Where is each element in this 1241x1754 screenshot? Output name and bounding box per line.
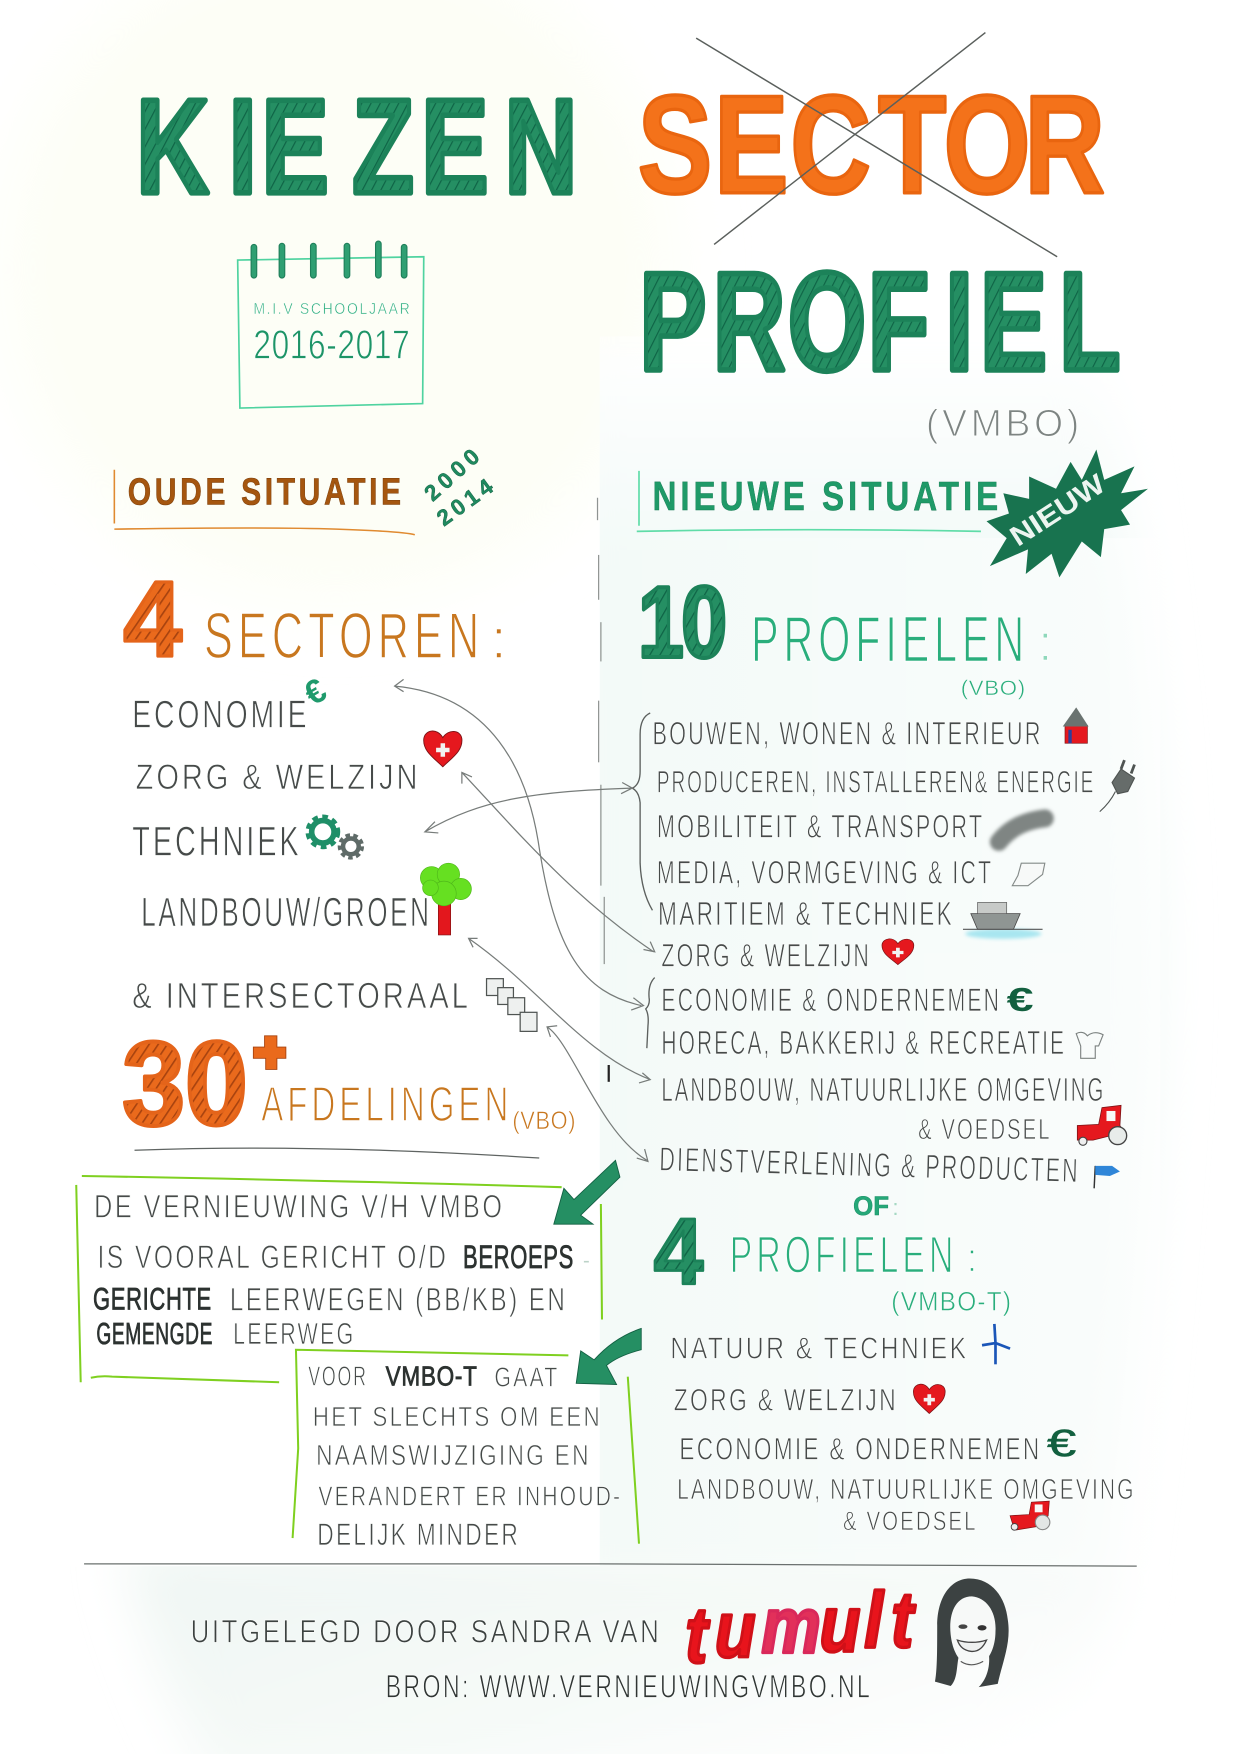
profile list: MEDIA, VORMGEVING & ICT [657, 854, 993, 890]
colon: : [1038, 613, 1052, 671]
vmbo-t list: ECONOMIE & ONDERNEMEN [679, 1432, 1041, 1467]
icon: road [999, 818, 1045, 842]
heading: sectoren: SECTOREN [204, 599, 484, 672]
vmbo-t label: (VMBO-T) [891, 1287, 1012, 1317]
badge: nieuw: NIEUW [1004, 468, 1111, 552]
arrow: techniek [425, 782, 632, 833]
arrow: intersectoraal [547, 1026, 648, 1161]
sector list: ECONOMIE [132, 693, 309, 737]
profile list: MOBILITEIT & TRANSPORT [657, 808, 984, 844]
panel: vmbo-t callout [293, 1328, 641, 1552]
icon: euro: € [1007, 982, 1034, 1019]
heading: profielen: PROFIELEN [730, 1225, 957, 1283]
icon: chef jacket [1076, 1032, 1103, 1058]
sector list: ZORG & WELZIJN [136, 759, 420, 797]
vmbo subtitle: (VMBO) [926, 403, 1083, 445]
profile list: MARITIEM & TECHNIEK [658, 896, 954, 933]
title word: sector: SECTOR [638, 66, 1105, 223]
badge: nieuw [987, 450, 1148, 577]
sector list: TECHNIEK [132, 817, 302, 864]
years: 2000 [419, 444, 484, 506]
profile list: ZORG & WELZIJN [661, 937, 871, 973]
vmbo-t list: NATUUR & TECHNIEK [670, 1333, 969, 1366]
icon: arrow [554, 1160, 620, 1224]
icon: tractor [1077, 1105, 1127, 1145]
icon: tractor [1010, 1501, 1050, 1530]
big number 30: 30 [122, 1017, 248, 1150]
colon: : [491, 607, 507, 670]
callout text: LEERWEG [233, 1318, 355, 1351]
callout text: VERANDERT ER INHOUD- [318, 1481, 622, 1512]
icon: tree [420, 863, 471, 935]
label: of: OF [853, 1191, 889, 1221]
big number 4: 4 [654, 1200, 703, 1304]
arrow: landbouw [469, 938, 650, 1083]
title word: profiel: PROFIEL [639, 243, 1121, 400]
rule under left column [135, 1148, 539, 1158]
callout frame [293, 1350, 639, 1544]
callout text [93, 1188, 590, 1351]
connector arrows [395, 679, 655, 1161]
icon: plug [1100, 760, 1135, 812]
callout text: HET SLECHTS OM EEN [313, 1401, 602, 1432]
callout text: GAAT [494, 1362, 559, 1393]
afdelingen label: AFDELINGEN [261, 1077, 512, 1132]
title word: kiezen: KIEZEN [136, 72, 577, 222]
heading: profielen: PROFIELEN [751, 602, 1029, 675]
vmbo-t list: & VOEDSEL [843, 1506, 978, 1536]
icon: ship [963, 902, 1043, 939]
heading frame [637, 471, 981, 531]
callout text: VMBO-T [386, 1361, 478, 1392]
arrow: zorg en welzijn [462, 772, 655, 952]
vbo label: (VBO) [961, 676, 1026, 700]
credit line: UITGELEGD DOOR SANDRA VAN [191, 1613, 661, 1649]
icon: house [1063, 707, 1089, 743]
callout text: GERICHTE [93, 1281, 212, 1316]
sector list [132, 672, 537, 1031]
callout text: NAAMSWIJZIGING EN [316, 1440, 591, 1472]
callout text [308, 1361, 622, 1552]
crossing out of sector [696, 33, 1057, 257]
icon: stacked papers [487, 979, 537, 1031]
divider [598, 498, 609, 1082]
portrait [935, 1578, 1009, 1687]
big number 4: 4 [123, 559, 182, 679]
footer rule [84, 1564, 1137, 1566]
icon: arrow [576, 1328, 641, 1384]
heading: nieuwe situatie: NIEUWE SITUATIE [652, 473, 1002, 519]
panel: oude situatie [114, 444, 576, 1150]
profile list [646, 707, 1135, 1190]
footer [191, 1577, 1009, 1704]
panel: vernieuwing callout [76, 1160, 620, 1382]
callout text: IS VOORAL GERICHT O/D [98, 1239, 448, 1275]
profile list: BOUWEN, WONEN & INTERIEUR [652, 715, 1043, 751]
callout text: BEROEPS [463, 1239, 574, 1275]
logo: tumult: tumult [685, 1577, 916, 1680]
icon: wind turbine [982, 1324, 1010, 1364]
vmbo-t list [670, 1324, 1136, 1536]
profile list: & VOEDSEL [918, 1114, 1052, 1146]
sector list: LANDBOUW/GROEN [141, 889, 432, 935]
plus sign [253, 1036, 286, 1069]
panel: nieuwe situatie [632, 450, 1148, 1536]
title [136, 33, 1121, 445]
icon: heart [882, 939, 914, 965]
callout text: DE VERNIEUWING V/H VMBO [94, 1188, 504, 1224]
heading: oude situatie: OUDE SITUATIE [128, 471, 405, 513]
icon: euro: € [298, 672, 333, 713]
small brace [646, 978, 655, 1048]
years [419, 444, 498, 531]
callout text: VOOR [308, 1361, 368, 1392]
arrow: economie [395, 679, 643, 1010]
icon: spiral rings [251, 241, 407, 278]
colon: : [892, 1195, 899, 1220]
calendar caption: M.I.V SCHOOLJAAR [253, 301, 411, 318]
sector list: & INTERSECTORAAL [132, 976, 471, 1016]
big number 10: 10 [638, 565, 724, 679]
icon: document [1012, 863, 1045, 886]
calendar note [238, 241, 424, 408]
callout text: LEERWEGEN (BB/KB) EN [230, 1282, 567, 1318]
callout frame [76, 1176, 602, 1382]
source line: BRON: WWW.VERNIEUWINGVMBO.NL [386, 1668, 872, 1704]
icon: flag [1094, 1166, 1120, 1188]
years: 2014 [432, 474, 498, 531]
heading frame [114, 470, 415, 535]
vbo label: (VBO) [512, 1108, 576, 1135]
callout text: - [583, 1250, 590, 1272]
profile list: ECONOMIE & ONDERNEMEN [661, 982, 1001, 1018]
icon: heart [913, 1384, 945, 1414]
brace [632, 713, 652, 910]
vmbo-t list: ZORG & WELZIJN [674, 1382, 898, 1417]
colon: : [966, 1234, 978, 1280]
icon: heart [424, 731, 462, 767]
calendar year: 2016-2017 [253, 322, 410, 368]
icon: euro: € [1047, 1423, 1076, 1465]
icon: gears [308, 817, 362, 858]
callout text: DELIJK MINDER [317, 1517, 520, 1552]
callout text: GEMENGDE [96, 1318, 213, 1351]
